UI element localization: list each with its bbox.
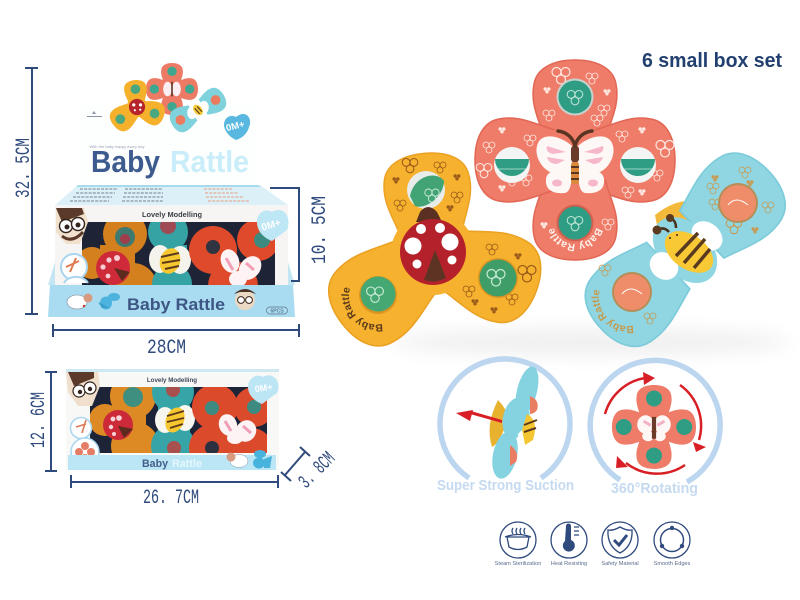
suction cup behind — [655, 201, 705, 240]
dimension: box height: 12. 6CM — [28, 392, 51, 448]
toys: bee — [149, 245, 191, 276]
tray title: Baby Rattle — [127, 295, 225, 314]
toys: butterfly — [220, 249, 262, 285]
sheep — [226, 452, 248, 468]
ring — [590, 360, 720, 482]
dimension: box depth bracket — [270, 188, 332, 281]
header title: Baby — [91, 144, 161, 179]
dragon — [98, 293, 120, 310]
icon: safety material — [602, 522, 638, 558]
mini spinner — [612, 385, 696, 469]
icon: heat resisting — [551, 522, 587, 558]
box heading: Lovely Modelling — [147, 377, 197, 384]
side view toy — [488, 364, 543, 481]
mini blue spinner — [166, 84, 230, 136]
header title light: Rattle — [170, 144, 249, 179]
box heading: Lovely Modelling — [142, 210, 202, 219]
ball: left — [494, 147, 530, 183]
toys: red — [189, 387, 267, 453]
band title light: Rattle — [172, 458, 202, 470]
mini yellow spinner — [106, 79, 168, 135]
title: 6 small box set — [642, 50, 782, 72]
toys: red — [189, 222, 275, 285]
butterfly — [536, 131, 614, 193]
spinner: yellow ladybird — [328, 152, 542, 347]
feature circles — [70, 418, 99, 466]
toys: orange — [90, 387, 156, 453]
spinner: coral butterfly — [474, 59, 676, 261]
caption: rotating: 360°Rotating — [611, 480, 698, 497]
red rotation arrows — [605, 378, 701, 474]
panel: display box — [48, 63, 295, 317]
dimension: box thickness: 3. 8CM — [295, 448, 341, 494]
toys: orange — [82, 222, 154, 285]
dimension: display width: 28CM — [147, 337, 186, 360]
dimension: box thickness — [281, 447, 341, 494]
piece count — [266, 307, 288, 315]
mini coral spinner — [146, 63, 198, 115]
ball: left — [359, 276, 397, 314]
ball: bottom — [556, 204, 594, 242]
icon: smooth edges — [654, 522, 690, 558]
age badge: 0M+ — [260, 218, 282, 234]
sheep — [67, 294, 92, 309]
floor shadow — [390, 329, 790, 355]
gold flowers — [599, 167, 774, 324]
ring — [440, 359, 570, 478]
toys: butterfly — [218, 414, 256, 444]
dragon — [253, 450, 272, 468]
age badge — [257, 210, 289, 241]
curved label: Baby Rattle — [591, 290, 634, 334]
bee — [644, 214, 728, 286]
icon: steam sterilization — [500, 522, 536, 558]
dimension: box depth bracket: 10. 5CM — [309, 196, 332, 264]
dimension: box width: 26. 7CM — [143, 487, 199, 510]
ball: upper — [718, 183, 758, 223]
side feature icons — [61, 254, 88, 283]
arrow heads — [616, 372, 706, 468]
piece count: 6PCS — [270, 309, 284, 315]
suction cup — [490, 400, 508, 447]
petals — [571, 138, 800, 361]
dimension: display width — [53, 324, 299, 360]
brand mark — [87, 111, 102, 117]
ball: top — [556, 78, 594, 116]
curved label: Baby Rattle — [341, 288, 382, 332]
box window — [90, 387, 267, 453]
age badge: 0M+ — [254, 382, 273, 394]
ladybird — [400, 207, 466, 285]
age badge — [248, 375, 279, 404]
monkey mascot — [66, 372, 100, 406]
box window — [82, 222, 275, 285]
ball: right — [620, 147, 656, 183]
toys: teal — [148, 222, 192, 285]
feature: suction — [440, 359, 570, 481]
petals — [314, 150, 551, 360]
toys: ladybird — [103, 410, 133, 440]
panel: single box — [66, 369, 279, 472]
blue band — [68, 455, 276, 470]
label: Steam Sterilization — [495, 561, 541, 567]
dimension: box width — [71, 475, 278, 510]
ball: lower — [612, 272, 652, 312]
display header card — [80, 63, 257, 186]
toys: teal — [151, 387, 194, 453]
dimension: display height: 32. 5CM — [13, 138, 36, 198]
box body — [55, 205, 288, 285]
toys: ladybird — [96, 251, 130, 285]
toys: bee — [155, 405, 195, 435]
band title: Baby — [142, 458, 169, 470]
petals — [475, 60, 675, 260]
label: Smooth Edges — [654, 561, 691, 567]
display tray — [48, 262, 295, 317]
box lid — [55, 185, 288, 205]
dimension: box height — [28, 372, 57, 471]
monkey mascot — [56, 208, 88, 244]
tagline: With the baby happy every day — [90, 144, 144, 149]
spinner: blue bee — [584, 152, 786, 348]
label: Safety Material — [601, 561, 639, 567]
ball: right — [478, 258, 518, 298]
petal flowers — [476, 68, 674, 230]
age badge: 0M+ — [225, 119, 246, 134]
ball: top — [407, 171, 445, 209]
red arrow — [456, 410, 502, 423]
petal flowers — [392, 158, 536, 314]
label: Heat Resisting — [551, 561, 587, 567]
age badge — [224, 114, 250, 140]
curved label: Baby Rattle — [549, 228, 603, 252]
dimension: display height — [13, 68, 38, 314]
monkey — [234, 289, 256, 310]
caption: suction: Super Strong Suction — [437, 477, 574, 494]
feature: rotating — [590, 360, 720, 482]
